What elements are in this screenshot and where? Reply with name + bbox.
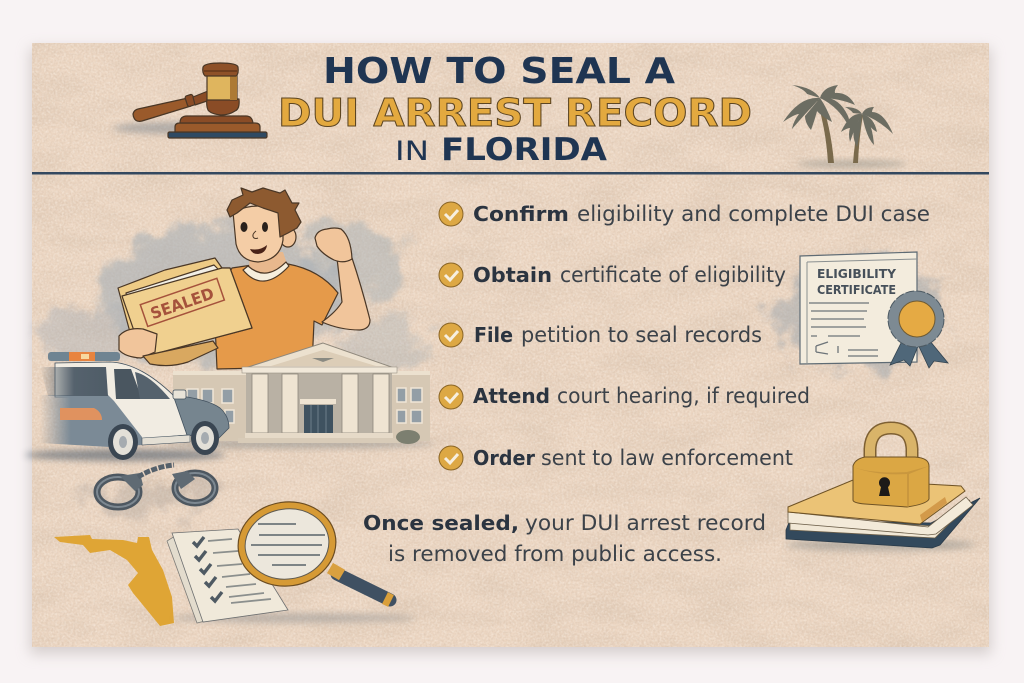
side windows: [114, 369, 142, 399]
step 1: confirm: Confirm: [473, 202, 569, 226]
title: HOW TO SEAL A: [323, 51, 675, 92]
icon: magnifying glass: [233, 496, 391, 601]
step 2: obtain: [439, 263, 786, 287]
rear window smear: [40, 367, 108, 396]
front hood: [173, 395, 229, 440]
title: [278, 51, 752, 168]
ribbon: [890, 335, 922, 366]
ear: [280, 227, 296, 247]
hair: [227, 188, 301, 237]
raised arm: [322, 258, 370, 330]
illustration: courthouse: [165, 343, 435, 448]
icon: palm trees: [783, 85, 907, 168]
eyes, nose and mouth: [240, 222, 248, 232]
rear wheel: [108, 424, 138, 460]
icon: checklist document: [167, 529, 415, 623]
icon: Florida map: [54, 535, 174, 626]
keyhole: [879, 477, 890, 496]
step 5: order: sent to law enforcement: [541, 446, 793, 470]
icon: gavel: [113, 63, 267, 138]
step 2: obtain: Obtain: [473, 263, 552, 287]
step 1: confirm: eligibility and complete DUI case: [577, 202, 930, 226]
icon: handcuffs: [97, 465, 215, 507]
shirt: [214, 264, 338, 369]
white roof and doors: [55, 362, 187, 439]
checklist steps: [439, 202, 930, 470]
sealed stamp: SEALED: [148, 284, 216, 323]
step 4: attend: court hearing, if required: [557, 384, 810, 408]
closing statement: your DUI arrest record: [525, 511, 766, 535]
folder: [118, 258, 252, 358]
light bar: [48, 352, 120, 361]
shackle: [870, 428, 912, 467]
neck: [249, 252, 287, 274]
illustration: police car: [25, 352, 229, 461]
watercolor wash behind character: [35, 220, 430, 511]
face: [233, 206, 283, 262]
step 4: attend: [439, 384, 810, 409]
title: IN: [395, 136, 429, 167]
fist: [315, 228, 352, 262]
rear body: [40, 395, 142, 447]
rosette: [888, 291, 944, 347]
step 5: order: Order: [473, 446, 535, 470]
divider line: [32, 172, 989, 174]
step 2: obtain: certificate of eligibility: [560, 263, 786, 287]
closing statement: is removed from public access.: [388, 542, 722, 566]
step 4: attend: Attend: [473, 384, 550, 408]
hand: [119, 329, 157, 358]
step 3: file: File: [474, 323, 513, 347]
front wheel: [191, 421, 219, 455]
title: DUI ARREST RECORD: [278, 91, 752, 135]
title: FLORIDA: [441, 132, 607, 168]
illustration: man holding sealed folder: [118, 188, 370, 369]
mirror: [173, 390, 186, 399]
lock body: [853, 457, 929, 507]
icon: eligibility certificate: CERTIFICATE: [817, 283, 896, 297]
closing statement: Once sealed,: [363, 511, 519, 535]
collar: [243, 262, 289, 281]
closing statement: [363, 511, 766, 566]
rocker: [142, 435, 190, 445]
icon: padlock on folders: [785, 428, 980, 551]
icon: eligibility certificate: [775, 252, 948, 368]
icon: eligibility certificate: ELIGIBILITY: [817, 267, 896, 281]
taillight: [60, 408, 102, 420]
step 3: file: petition to seal records: [521, 323, 762, 347]
